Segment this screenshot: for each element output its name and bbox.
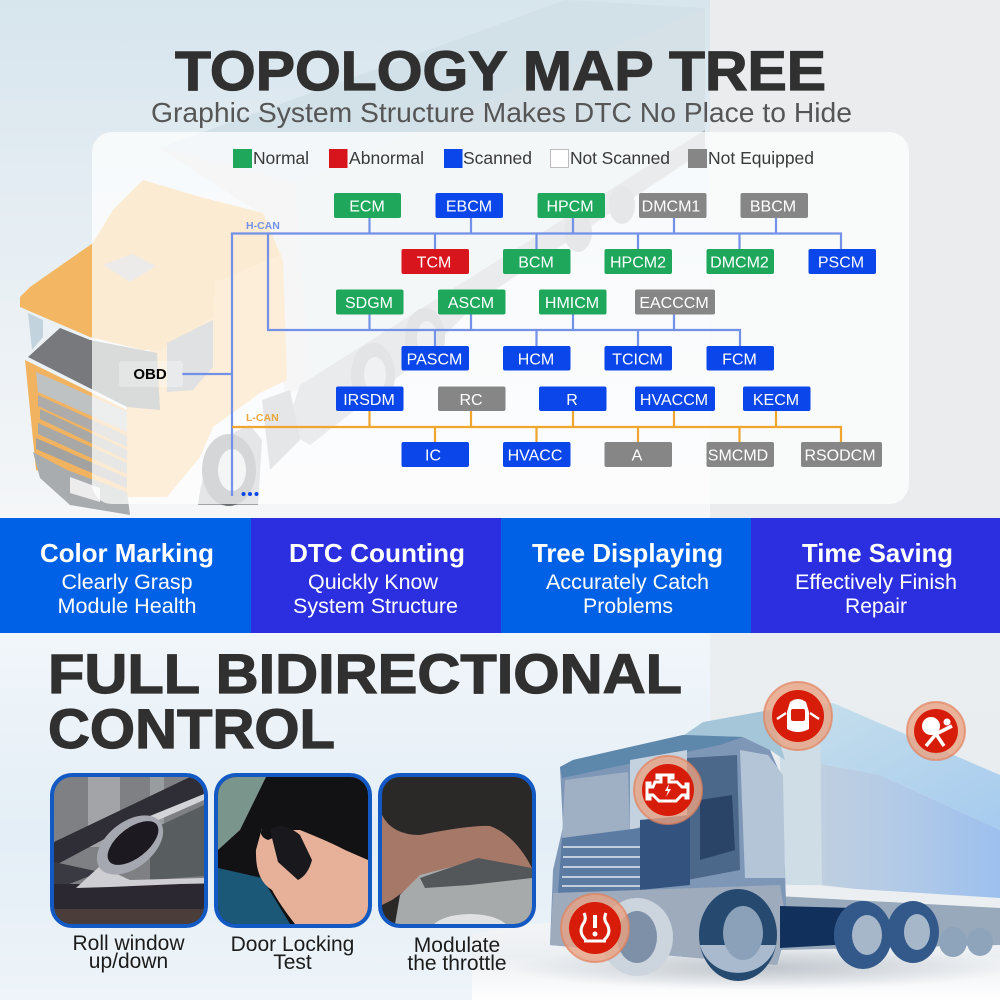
feature: time saving (751, 518, 1000, 633)
module RC (438, 386, 506, 411)
module HVACCM (635, 386, 715, 411)
more indicator dots (242, 492, 258, 496)
module SMCMD: SMCMD (708, 448, 768, 464)
windshield (562, 772, 630, 838)
cab roof and visor (20, 180, 280, 350)
photo: throttle (378, 773, 536, 928)
module PSCM: PSCM (818, 254, 864, 272)
module IRSDM: IRSDM (343, 392, 395, 409)
caption: roll window: up/down (89, 950, 168, 973)
module SDGM (336, 290, 404, 314)
feature: color marking: Module Health (58, 595, 196, 618)
legend (233, 148, 814, 168)
module BBCM (740, 193, 808, 218)
module SMCMD (706, 442, 774, 467)
module row 6 (402, 442, 882, 467)
module BBCM: BBCM (750, 198, 796, 216)
module RC: RC (459, 392, 483, 409)
module DMCM2: DMCM2 (710, 254, 769, 272)
feature: DTC counting: DTC Counting (289, 538, 465, 568)
legend: not equipped: Not Equipped (708, 148, 814, 168)
caption: roll window: Roll window (72, 932, 185, 955)
module EACCCM (635, 290, 715, 314)
front grille (25, 360, 127, 498)
legend: scanned: Scanned (463, 148, 532, 168)
heading: full bidirectional control: FULL BIDIRECTIONAL (48, 642, 682, 705)
feature: DTC counting (251, 518, 501, 633)
feature: time saving: Effectively Finish (795, 571, 957, 594)
yellow truck cab (20, 180, 300, 515)
label: OBD: OBD (133, 366, 167, 383)
module HMICM (539, 290, 606, 314)
module R: R (566, 392, 578, 409)
module EACCCM: EACCCM (639, 295, 709, 312)
cab interior (640, 815, 690, 890)
module HMICM: HMICM (545, 295, 599, 312)
module R (539, 386, 606, 411)
module EBCM (436, 193, 503, 218)
icon: tire pressure warning (561, 894, 629, 962)
module PASCM: PASCM (407, 352, 462, 368)
caption: door locking test: Test (273, 951, 312, 974)
caption: door locking test: Door Locking (231, 933, 354, 956)
heading: full bidirectional control: CONTROL (48, 697, 335, 760)
cab (550, 735, 787, 965)
feature: time saving: Time Saving (802, 538, 953, 568)
module row 4 (402, 346, 774, 370)
module HPCM2 (604, 249, 672, 274)
icon: engine warning (634, 756, 702, 824)
wheels (601, 889, 993, 981)
icon: airbag warning (907, 702, 965, 760)
module HVACC: HVACC (508, 448, 562, 464)
trailer top face (770, 703, 1000, 830)
grille (558, 828, 640, 893)
roof fairing (677, 710, 785, 760)
door window and seat (687, 755, 740, 880)
module HCM (503, 346, 570, 370)
module TCICM (604, 346, 672, 370)
lower cab (550, 885, 787, 965)
module FCM (706, 346, 774, 370)
heading: full bidirectional control (48, 642, 682, 760)
cab side (93, 180, 287, 497)
module TCM: TCM (417, 254, 451, 272)
windshield (28, 328, 160, 410)
module ECM (334, 193, 401, 218)
module row 5 (336, 386, 810, 411)
fuel tank (780, 906, 853, 948)
module ASCM (438, 290, 506, 314)
caption: modulate the throttle: Modulate (414, 934, 500, 957)
L-CAN bus lines (232, 411, 841, 442)
door window (167, 320, 213, 392)
module KECM: KECM (753, 392, 799, 409)
feature: time saving: Repair (845, 595, 907, 618)
bumper (33, 452, 130, 515)
feature: color marking: Clearly Grasp (62, 571, 192, 594)
module DMCM1 (639, 193, 706, 218)
background: bottom section (0, 633, 1000, 1000)
photo: key fob (214, 773, 372, 928)
label: L-CAN: L-CAN (246, 412, 279, 424)
title: TOPOLOGY MAP TREE (175, 39, 826, 102)
module TCICM: TCICM (612, 352, 663, 368)
module A (604, 442, 672, 467)
module PSCM (808, 249, 876, 274)
module EBCM: EBCM (446, 198, 492, 216)
module row 1 (334, 193, 808, 218)
module RSODCM (801, 442, 882, 467)
module BCM (503, 249, 570, 274)
caption: modulate the throttle: the throttle (407, 952, 507, 975)
module A: A (632, 448, 643, 464)
H-CAN bus lines (182, 218, 841, 496)
module HPCM (538, 193, 605, 218)
module HVACC (503, 442, 570, 467)
feature: color marking: Color Marking (40, 538, 214, 568)
module DMCM1: DMCM1 (642, 198, 700, 216)
front wheel (198, 425, 262, 505)
feature: tree displaying (501, 518, 751, 633)
module IC (402, 442, 469, 467)
feature: color marking (0, 518, 251, 633)
module BCM: BCM (518, 254, 554, 272)
module DMCM2 (706, 249, 774, 274)
module ASCM: ASCM (448, 295, 494, 312)
icon: door warning (764, 682, 832, 750)
chassis rail (777, 884, 1000, 908)
panel: topology map (92, 132, 909, 504)
module row 2 (402, 249, 876, 274)
legend: not scanned: Not Scanned (570, 148, 670, 168)
feature: tree displaying: Accurately Catch (546, 571, 709, 594)
legend: abnormal: Abnormal (349, 148, 424, 168)
feature: DTC counting: Quickly Know (308, 571, 439, 594)
module TCM (402, 249, 469, 274)
module HVACCM: HVACCM (640, 392, 708, 409)
module HCM: HCM (518, 352, 554, 368)
module SDGM: SDGM (345, 295, 393, 312)
photo: roll window (50, 773, 208, 928)
x-ray truck illustration (510, 703, 1000, 990)
module HPCM: HPCM (546, 198, 594, 216)
module HPCM2: HPCM2 (610, 254, 666, 272)
module IC: IC (425, 448, 441, 464)
feature: tree displaying: Tree Displaying (532, 538, 723, 568)
feature: tree displaying: Problems (583, 595, 673, 618)
ground shadow (510, 946, 1000, 990)
feature band (0, 518, 1000, 633)
module KECM (743, 386, 810, 411)
feature: DTC counting: System Structure (293, 595, 458, 618)
module IRSDM (336, 386, 404, 411)
steps (262, 390, 300, 470)
subtitle: Graphic System Structure Makes DTC No Place to Hide (151, 97, 852, 128)
label: H-CAN: H-CAN (246, 220, 280, 232)
module PASCM (402, 346, 469, 370)
module FCM: FCM (722, 352, 757, 368)
module ECM: ECM (349, 198, 385, 216)
legend: normal: Normal (253, 148, 309, 168)
module row 3 (336, 290, 715, 314)
trailer side (800, 760, 1000, 905)
module RSODCM: RSODCM (804, 448, 876, 464)
label: OBD (119, 361, 183, 387)
background: top section (0, 0, 1000, 518)
faded truck trailer (160, 0, 705, 445)
